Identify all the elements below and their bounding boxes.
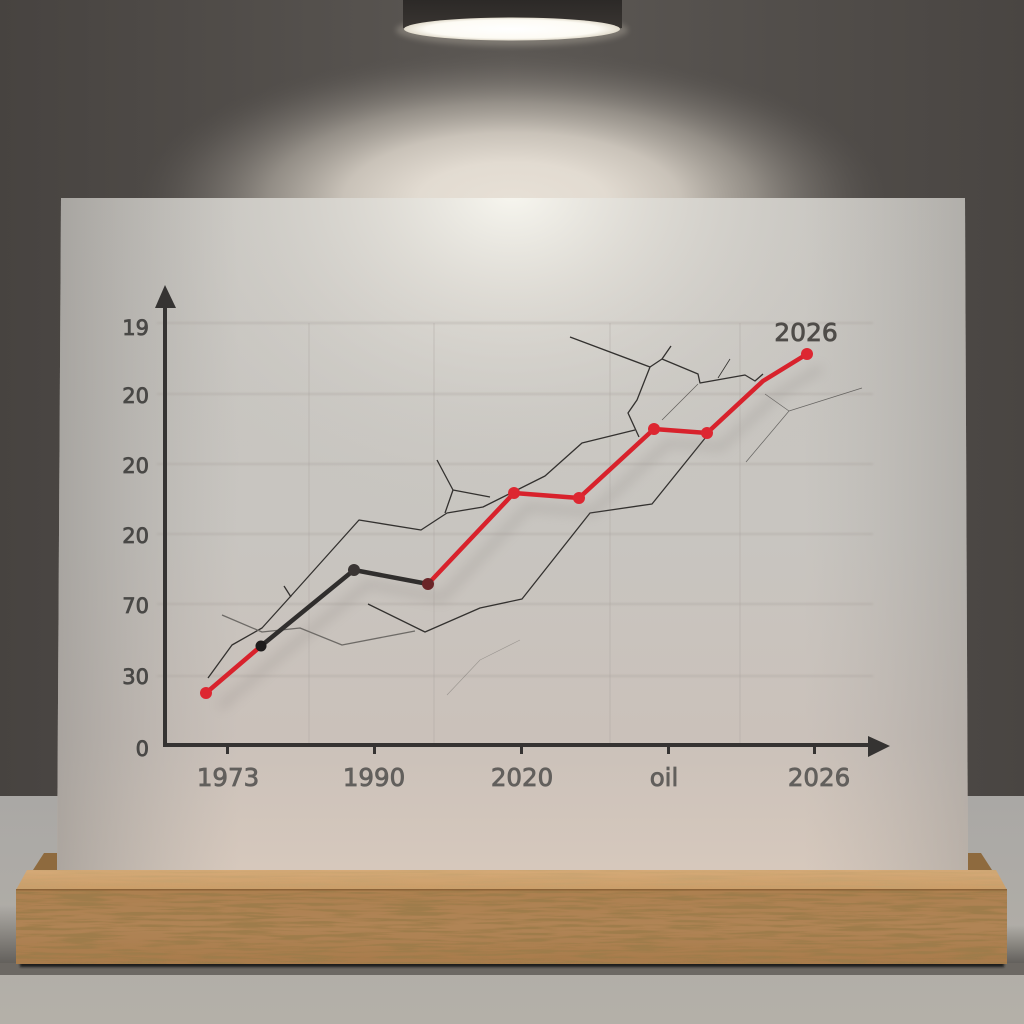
panel: translucent chart sheet [57,198,968,870]
wooden base [16,853,1007,964]
wall background [0,0,1024,797]
dark line segment [261,570,428,646]
line chart shadow [220,368,821,707]
label: 2026: 2026 [774,318,838,347]
y axis labels: 20 [122,384,149,408]
chart grid lines [157,323,873,676]
y axis labels: 19 [122,316,149,340]
x axis labels: 1990 [343,763,405,792]
red line segments [206,354,807,693]
floor [0,796,1024,1024]
x axis labels [197,763,850,792]
light glow on wall [137,50,887,350]
x axis labels: 2020 [491,763,553,792]
base shadow [0,905,1024,975]
icon: ceiling lamp [396,0,628,46]
y axis labels: 20 [122,454,149,478]
data points [200,348,813,699]
thin cracked lines [208,337,862,695]
y axis labels: 20 [122,524,149,548]
y axis labels: 0 [136,737,149,761]
axes [155,285,890,757]
x axis labels: 2026 [788,763,850,792]
x axis labels: oil [650,763,678,792]
y axis labels: 70 [122,594,149,618]
y axis labels [122,316,149,761]
y axis labels: 30 [122,665,149,689]
x axis labels: 1973 [197,763,259,792]
